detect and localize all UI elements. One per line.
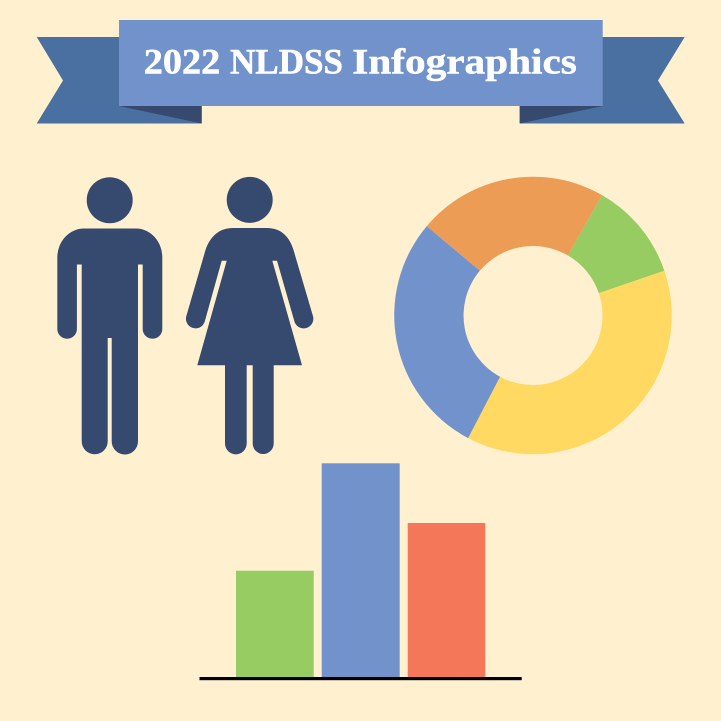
title: NLDSS: [230, 42, 343, 82]
title banner: [37, 20, 685, 124]
right ribbon tail: [520, 37, 685, 124]
banner panel: [119, 20, 603, 106]
right ribbon fold: [520, 106, 603, 124]
left ribbon tail: [37, 37, 202, 124]
icon: man: [57, 177, 162, 454]
segment: green: [568, 195, 664, 293]
title: Infographics: [352, 42, 577, 82]
donut chart: [394, 177, 672, 454]
bar: blue: [322, 463, 400, 678]
bar chart: [200, 463, 522, 680]
segment: yellow: [468, 271, 672, 454]
icon: woman: [186, 177, 313, 454]
bar: red: [408, 523, 485, 678]
title: [144, 42, 577, 82]
bar: green: [236, 571, 314, 678]
left ribbon fold: [119, 106, 202, 124]
segment: orange: [427, 177, 602, 271]
title: 2022: [144, 42, 220, 82]
segment: blue: [394, 226, 500, 438]
axis line: [200, 677, 522, 680]
